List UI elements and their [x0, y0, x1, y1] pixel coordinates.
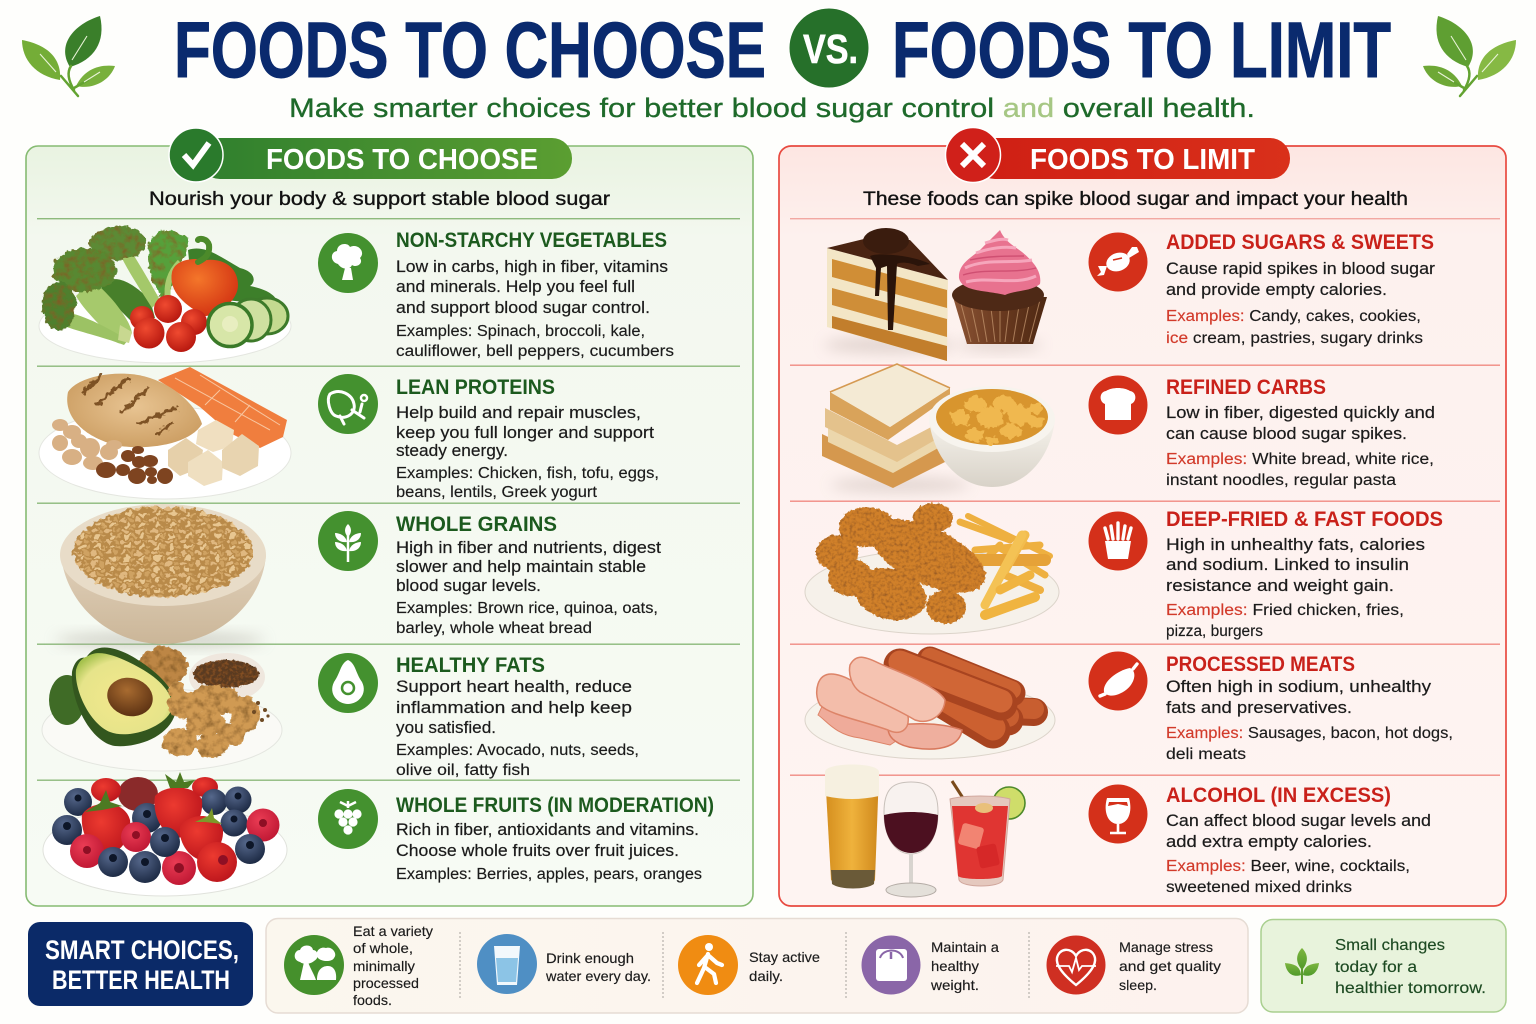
text: refined carbs: Low in fiber, digested quickly and	[1166, 404, 1435, 422]
text: refined carbs: can cause blood sugar spikes.	[1166, 425, 1407, 443]
icon: sprout	[1285, 948, 1319, 984]
panel subtitle: Nourish your body & support stable blood sugar	[149, 188, 611, 210]
panel subtitle: These foods can spike blood sugar and impact your health	[863, 188, 1408, 210]
text: whole grains: blood sugar levels.	[396, 577, 541, 595]
text: non-starchy vegetables: cauliflower, bell peppers, cucumbers	[396, 343, 674, 360]
icon: berries	[318, 789, 378, 849]
text: lean proteins: beans, lentils, Greek yogurt	[396, 484, 598, 501]
food image: fried food	[805, 503, 1059, 634]
text: healthy weight: weight.	[930, 978, 979, 993]
text: whole fruits: Choose whole fruits over fruit juices.	[396, 842, 679, 860]
food image: healthy fats	[42, 647, 282, 771]
header ribbon: foods to limit	[946, 128, 1290, 182]
food image: processed meats	[805, 657, 1055, 759]
text: healthy weight: Maintain a	[931, 940, 999, 955]
badge: vs	[790, 8, 868, 88]
text: healthy fats: inflammation and help keep	[396, 699, 632, 717]
text: healthy fats: Support heart health, reduce	[396, 678, 632, 696]
text: alcohol	[1166, 783, 1431, 896]
text: added sugars: ADDED SUGARS & SWEETS	[1166, 230, 1434, 254]
text: deep-fried: and sodium. Linked to insulin	[1166, 556, 1409, 574]
text: healthy fats: Examples: Avocado, nuts, seeds,	[396, 742, 639, 759]
text: drink water: Drink enough	[546, 951, 634, 966]
text: eat whole foods: of whole,	[353, 941, 413, 956]
text: healthy fats: olive oil, fatty fish	[396, 762, 530, 779]
icon: leaves right	[1423, 16, 1516, 96]
header ribbon: foods to choose	[169, 128, 572, 182]
text: whole grains	[396, 512, 661, 637]
icon: chicken	[318, 374, 378, 434]
text: lean proteins: LEAN PROTEINS	[396, 375, 555, 399]
text: non-starchy vegetables: and minerals. Help you feel full	[396, 278, 635, 296]
text: added sugars: Cause rapid spikes in blood sugar	[1166, 260, 1436, 278]
food image: whole grains	[55, 504, 266, 647]
text: non-starchy vegetables	[396, 228, 674, 360]
panel: healthy habits	[266, 918, 1248, 1013]
habit: stay active	[678, 935, 738, 995]
food image: alcoholic drinks	[825, 764, 1025, 897]
text: processed meats: fats and preservatives.	[1166, 699, 1352, 717]
text: manage stress: and get quality	[1119, 959, 1221, 974]
title: foods to limit: FOODS TO LIMIT	[892, 5, 1391, 94]
icon: leaves left	[22, 16, 115, 96]
banner: smart choices: SMART CHOICES,	[45, 935, 239, 965]
text: alcohol: sweetened mixed drinks	[1166, 879, 1352, 896]
text: lean proteins: Examples: Chicken, fish, tofu, eggs,	[396, 465, 659, 482]
food image: bread and pasta	[822, 364, 1055, 492]
text: deep-fried	[1166, 507, 1443, 640]
habit: drink water	[477, 934, 537, 994]
text: small changes: healthier tomorrow.	[1335, 980, 1486, 997]
text: whole grains: barley, whole wheat bread	[396, 620, 592, 637]
text: deep-fried: High in unhealthy fats, calories	[1166, 536, 1425, 554]
text: whole grains: slower and help maintain stable	[396, 558, 646, 576]
text: whole fruits: Examples: Berries, apples, pears, oranges	[396, 866, 702, 883]
text: processed meats	[1166, 652, 1453, 763]
banner: smart choices	[28, 922, 253, 1006]
text: refined carbs	[1166, 375, 1435, 489]
icon: sausage	[1088, 652, 1148, 710]
text: whole fruits	[396, 793, 714, 883]
text: added sugars: ice cream, pastries, sugary drinks	[1166, 330, 1423, 347]
text: whole fruits: WHOLE FRUITS (IN MODERATION)	[396, 793, 714, 817]
text: whole grains: High in fiber and nutrients, digest	[396, 539, 661, 557]
food image: vegetables	[39, 226, 291, 363]
banner: smart choices: BETTER HEALTH	[52, 965, 230, 995]
text: eat whole foods: minimally	[353, 959, 415, 974]
text: deep-fried: pizza, burgers	[1166, 623, 1263, 640]
text: added sugars: and provide empty calories.	[1166, 281, 1387, 299]
food image: fruits	[43, 772, 287, 896]
text: refined carbs: REFINED CARBS	[1166, 375, 1326, 399]
text: non-starchy vegetables: and support blood sugar control.	[396, 299, 650, 317]
text: refined carbs: instant noodles, regular pasta	[1166, 472, 1396, 489]
panel: foods to choose	[26, 128, 753, 906]
badge: vs: VS.	[803, 26, 858, 72]
text: small changes	[1335, 937, 1486, 997]
icon: wine glass	[1088, 784, 1148, 844]
text: whole fruits: Rich in fiber, antioxidants and vitamins.	[396, 821, 699, 839]
text: healthy fats	[396, 653, 639, 779]
text: eat whole foods	[353, 924, 433, 1008]
text: drink water	[545, 951, 651, 984]
callout: small changes	[1261, 920, 1506, 1012]
text: manage stress: sleep.	[1119, 978, 1157, 993]
text: alcohol: add extra empty calories.	[1166, 833, 1372, 851]
subtitle: Make smarter choices for better blood sugar control and overall health.	[289, 93, 1255, 123]
text: deep-fried: Examples: Fried chicken, fries,	[1166, 602, 1404, 619]
text: healthy weight: healthy	[931, 959, 979, 974]
text: small changes: Small changes	[1335, 937, 1445, 954]
icon: candy	[1088, 232, 1148, 292]
header ribbon: foods to limit: FOODS TO LIMIT	[1030, 144, 1256, 176]
text: eat whole foods: processed	[353, 976, 419, 991]
text: processed meats: Often high in sodium, unhealthy	[1166, 678, 1432, 696]
text: manage stress: Manage stress	[1119, 940, 1213, 955]
text: stay active: Stay active	[749, 950, 820, 965]
text: eat whole foods: foods.	[353, 993, 392, 1008]
text: lean proteins: steady energy.	[396, 442, 508, 460]
text: healthy weight	[930, 940, 999, 993]
text: added sugars: Examples: Candy, cakes, cookies,	[1166, 308, 1421, 325]
food image: proteins	[39, 367, 291, 499]
text: deep-fried: resistance and weight gain.	[1166, 577, 1394, 595]
text: lean proteins	[396, 375, 659, 501]
habit: manage stress	[1046, 936, 1106, 994]
text: processed meats: deli meats	[1166, 746, 1246, 763]
text: processed meats: Examples: Sausages, bacon, hot dogs,	[1166, 725, 1453, 742]
text: eat whole foods: Eat a variety	[353, 924, 433, 939]
panel: foods to limit	[779, 128, 1506, 906]
header ribbon: foods to choose: FOODS TO CHOOSE	[266, 144, 538, 176]
text: alcohol: Examples: Beer, wine, cocktails,	[1166, 858, 1410, 875]
text: added sugars	[1166, 230, 1436, 347]
icon: bread	[1088, 376, 1148, 434]
text: stay active: daily.	[749, 969, 783, 984]
icon: avocado	[318, 653, 378, 713]
text: drink water: water every day.	[545, 969, 651, 984]
text: healthy fats: you satisfied.	[396, 719, 496, 737]
text: non-starchy vegetables: Low in carbs, high in fiber, vitamins	[396, 258, 668, 276]
food image: cake and cupcake	[824, 228, 1047, 361]
text: alcohol: ALCOHOL (IN EXCESS)	[1166, 783, 1391, 807]
text: small changes: today for a	[1335, 959, 1417, 976]
text: non-starchy vegetables: Examples: Spinach, broccoli, kale,	[396, 323, 645, 340]
text: healthy fats: HEALTHY FATS	[396, 653, 545, 677]
text: alcohol: Can affect blood sugar levels and	[1166, 812, 1431, 830]
icon: cauliflower	[318, 233, 378, 293]
text: processed meats: PROCESSED MEATS	[1166, 652, 1355, 676]
text: whole grains: Examples: Brown rice, quinoa, oats,	[396, 600, 658, 617]
icon: fries	[1088, 512, 1148, 570]
text: deep-fried: DEEP-FRIED & FAST FOODS	[1166, 507, 1443, 531]
title: foods to choose: FOODS TO CHOOSE	[174, 5, 766, 94]
text: refined carbs: Examples: White bread, white rice,	[1166, 451, 1434, 468]
text: non-starchy vegetables: NON-STARCHY VEGETABLES	[396, 228, 667, 252]
icon: wheat	[318, 511, 378, 571]
habit: eat whole foods	[284, 935, 344, 995]
text: lean proteins: keep you full longer and support	[396, 424, 654, 442]
text: stay active	[749, 950, 820, 984]
text: whole grains: WHOLE GRAINS	[396, 512, 557, 536]
text: lean proteins: Help build and repair muscles,	[396, 404, 641, 422]
habit: healthy weight	[862, 936, 920, 994]
text: manage stress	[1119, 940, 1221, 993]
